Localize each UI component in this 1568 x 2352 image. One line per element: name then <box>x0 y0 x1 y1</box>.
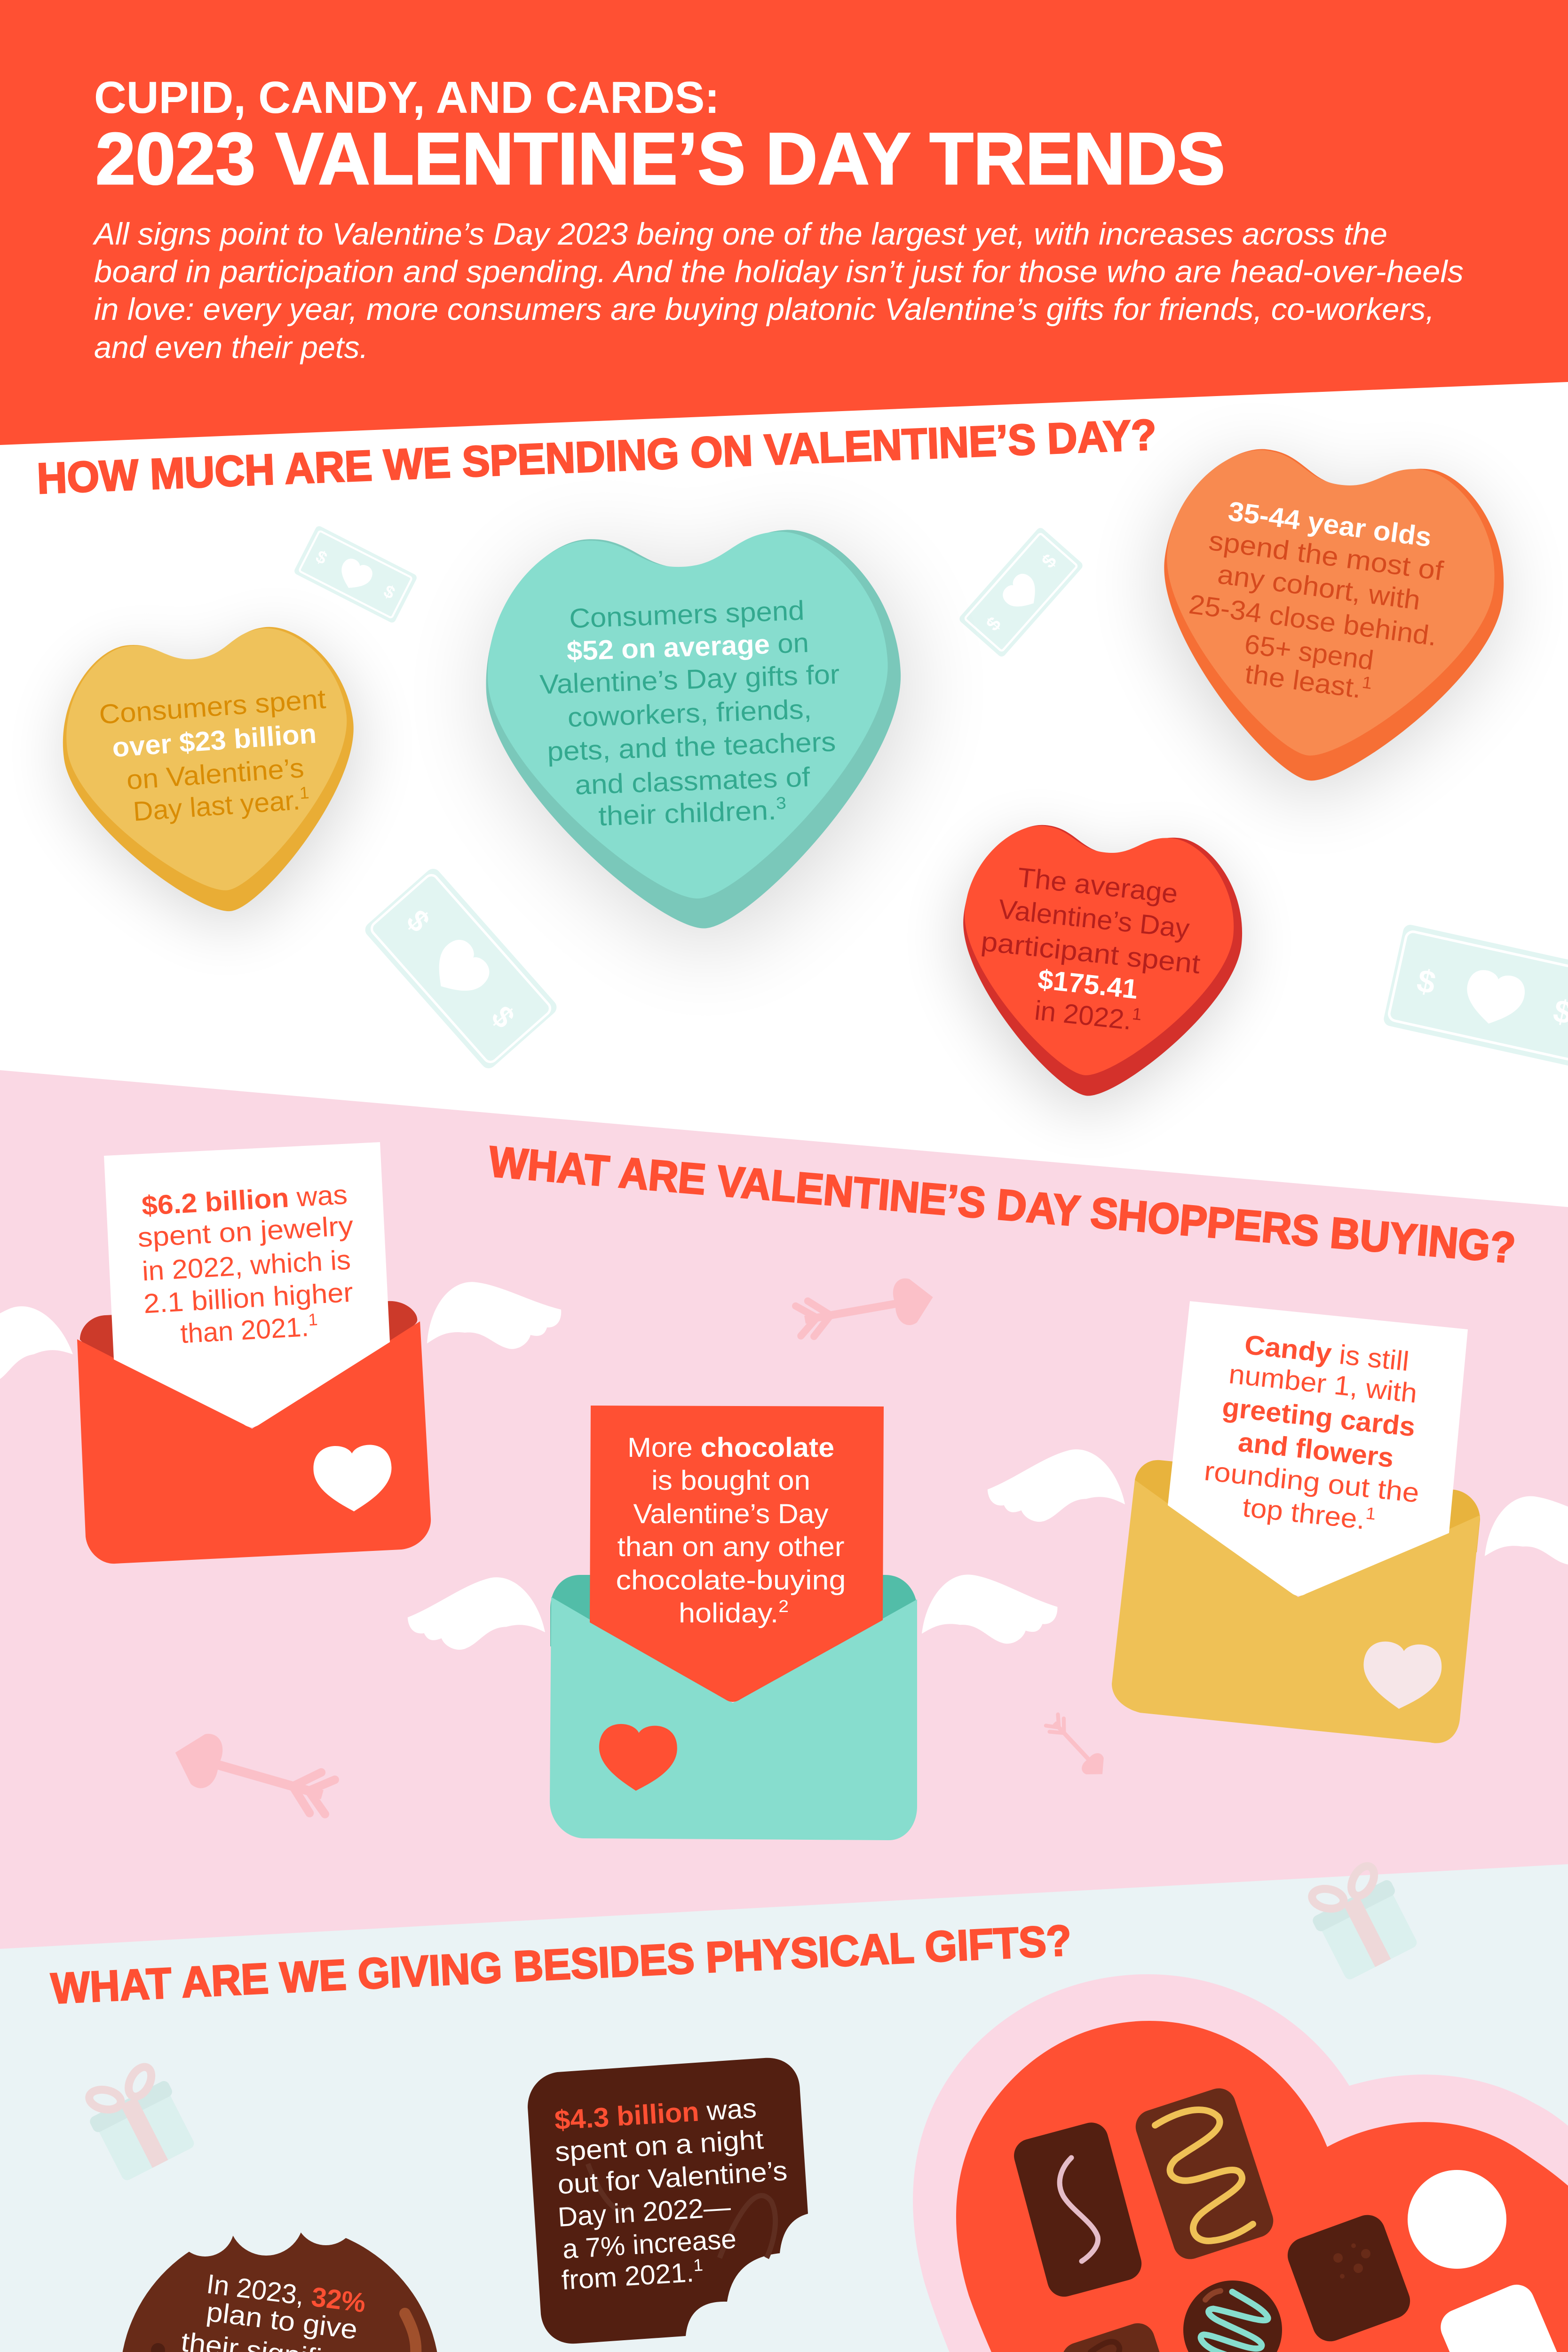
chocolate: round with teal drizzle <box>1183 2280 1282 2352</box>
envelope: teal with chocolate note <box>404 1406 1059 1840</box>
orange heart text: the least. <box>1243 659 1357 703</box>
jewelry text: $6.2 billion was <box>141 1179 348 1221</box>
icon: dollar bill small left: $ <box>313 546 331 568</box>
icon: dollar bill small left: $ <box>380 581 398 603</box>
orange heart text: 1 <box>1361 672 1373 693</box>
cookie text: In 2023, 32% <box>205 2269 367 2319</box>
chocolate bar text: $4.3 billion was <box>554 2093 757 2136</box>
yellow heart text <box>98 683 327 827</box>
teal heart text: $52 on average on <box>566 628 809 667</box>
jewelry text <box>137 1179 354 1349</box>
icon: gift left <box>76 2055 199 2184</box>
icon: arrow lower left <box>167 1726 338 1824</box>
intro paragraph: board in participation and spending. And the holiday isn’t just for those who are head-over-heels <box>94 254 1464 289</box>
teal heart text: Consumers spend <box>569 595 805 634</box>
icon: dollar bill small centre <box>958 526 1084 658</box>
icon: dollar bill large left <box>362 866 560 1072</box>
chocolate: long brown with yellow drizzle <box>1131 2084 1278 2264</box>
candy text: and flowers <box>1237 1427 1395 1473</box>
yellow heart text: 1 <box>299 783 310 803</box>
red heart text: in 2022. <box>1033 995 1133 1036</box>
jewelry text: in 2022, which is <box>141 1245 351 1287</box>
teal heart text: coworkers, friends, <box>567 694 812 733</box>
jewelry text: 2.1 billion higher <box>143 1277 354 1319</box>
orange heart text <box>1187 496 1446 706</box>
chocolate bar text: Day in 2022— <box>557 2192 731 2233</box>
white chocolate round <box>1408 2170 1506 2269</box>
chocolate bar text: spent on a night <box>554 2124 764 2168</box>
chocolate text: is bought on <box>651 1465 810 1496</box>
candy heart: yellow <box>50 617 380 943</box>
title line 2: 2023 VALENTINE’S DAY TRENDS <box>95 118 1225 200</box>
teal heart text: 3 <box>776 793 786 813</box>
red heart text: participant spent <box>980 926 1202 979</box>
icon: dollar bill small centre: $ <box>982 612 1005 635</box>
candy text: rounding out the <box>1203 1455 1421 1509</box>
icon: pale heart seal <box>1360 1640 1443 1712</box>
heart chocolate box <box>913 1974 1568 2352</box>
candy heart: teal <box>479 525 918 954</box>
chocolate bar text: from 2021. <box>561 2257 693 2296</box>
chocolate bar text: 1 <box>693 2255 704 2275</box>
red heart text: $175.41 <box>1037 964 1139 1005</box>
intro paragraph: and even their pets. <box>94 330 368 365</box>
chocolate: dark square with dots <box>1283 2210 1415 2346</box>
jewelry text: spent on jewelry <box>137 1210 354 1253</box>
jewelry text: 1 <box>308 1310 318 1329</box>
chocolate note paper <box>590 1406 884 1702</box>
icon: arrow top centre <box>794 1274 937 1344</box>
chocolate bar text: out for Valentine’s <box>557 2155 788 2200</box>
candy heart: orange <box>1135 438 1517 816</box>
intro paragraph: in love: every year, more consumers are buying platonic Valentine’s gifts for friends, co-workers, <box>94 292 1434 326</box>
chocolate: brown square with dark drizzle <box>1057 2319 1179 2352</box>
cookie text: plan to give <box>205 2296 359 2345</box>
red heart text <box>980 862 1202 1037</box>
icon: dollar bill small left <box>293 525 418 624</box>
icon: white heart seal <box>313 1444 393 1513</box>
chocolate bar text: a 7% increase <box>562 2224 737 2265</box>
icon: dollar bill right <box>1382 923 1568 1069</box>
chocolate: long dark with pink drizzle <box>1010 2119 1145 2301</box>
bitten chocolate bar with night-out stat <box>528 2058 808 2344</box>
icon: red heart seal <box>597 1723 678 1793</box>
teal heart text: and classmates of <box>574 762 811 801</box>
heading: buying: WHAT ARE VALENTINE’S DAY SHOPPERS BUYING? <box>487 1137 1517 1272</box>
candy heart: red <box>944 818 1251 1123</box>
heading: spending: HOW MUCH ARE WE SPENDING ON VALENTINE’S DAY? <box>36 411 1157 503</box>
candy text: Candy is still <box>1243 1329 1410 1377</box>
chocolate text <box>616 1432 846 1629</box>
yellow heart text: on Valentine’s <box>126 753 305 795</box>
orange heart text: 65+ spend <box>1243 628 1376 676</box>
section background: ice blue <box>0 1864 1568 2352</box>
orange heart text: any cohort, with <box>1216 559 1422 616</box>
candy text: number 1, with <box>1227 1359 1418 1409</box>
candy text: top three. <box>1241 1492 1359 1534</box>
header text <box>92 72 1464 365</box>
icon: gift top right <box>1299 1854 1422 1983</box>
teal heart text <box>539 595 840 832</box>
yellow heart text: over $23 billion <box>111 718 317 763</box>
candy note paper <box>1168 1301 1468 1596</box>
icon: dollar bill large left: $ <box>400 903 436 938</box>
orange heart text: spend the most of <box>1207 525 1446 587</box>
jewelry note paper <box>104 1142 390 1427</box>
heading: besides physical gifts: WHAT ARE WE GIVING BESIDES PHYSICAL GIFTS? <box>50 1916 1073 2013</box>
chocolate text: chocolate-buying <box>616 1565 846 1596</box>
teal heart text: pets, and the teachers <box>546 726 836 767</box>
red heart text: Valentine’s Day <box>997 894 1191 944</box>
candy text <box>1203 1329 1421 1536</box>
chocolate text: Valentine’s Day <box>633 1499 829 1529</box>
red heart text: The average <box>1016 862 1179 909</box>
icon: arrow small <box>1043 1711 1112 1783</box>
candy text: 1 <box>1365 1503 1377 1524</box>
yellow heart text: Day last year. <box>132 785 299 827</box>
intro paragraph: All signs point to Valentine’s Day 2023 being one of the largest yet, with increases across the <box>92 216 1387 251</box>
candy text: greeting cards <box>1221 1392 1417 1442</box>
envelope: red with jewelry note <box>0 1142 561 1564</box>
header background <box>0 0 1568 445</box>
section background: pink <box>0 1070 1568 2023</box>
cookie text <box>159 2269 383 2352</box>
envelope: yellow with candy note <box>983 1301 1568 1743</box>
red heart text: 1 <box>1131 1004 1143 1024</box>
yellow heart text: Consumers spent <box>98 683 327 730</box>
icon: dollar bill large left: $ <box>485 999 522 1034</box>
icon: dollar bill right: $ <box>1414 962 1439 1001</box>
chocolate text: than on any other <box>617 1532 845 1562</box>
title line 1: CUPID, CANDY, AND CARDS: <box>94 72 720 123</box>
jewelry text: than 2021. <box>180 1311 310 1349</box>
chocolate text: 2 <box>778 1597 789 1616</box>
teal heart text: their children. <box>598 795 763 832</box>
chocolate bar text <box>554 2093 788 2296</box>
cookie with experience stat <box>120 2180 440 2352</box>
icon: dollar bill small centre: $ <box>1037 550 1061 572</box>
intro paragraph <box>92 216 1464 365</box>
chocolate text: More chocolate <box>627 1432 834 1463</box>
chocolate text: holiday. <box>679 1598 771 1629</box>
orange heart text: 25-34 close behind. <box>1187 589 1439 652</box>
teal heart text: Valentine’s Day gifts for <box>539 659 840 700</box>
orange heart text: 35-44 year olds <box>1227 496 1433 553</box>
white chocolate square <box>1435 2279 1564 2352</box>
